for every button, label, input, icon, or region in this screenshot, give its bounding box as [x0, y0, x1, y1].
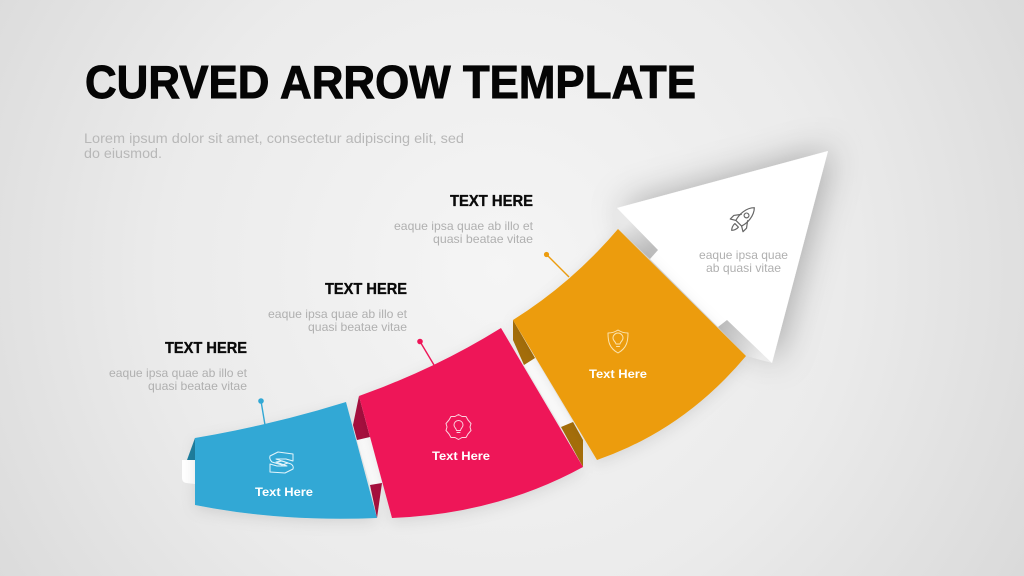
title: CURVED ARROW TEMPLATE — [85, 56, 696, 108]
label: red: Text Here — [432, 449, 490, 463]
callout: step 1 text — [109, 340, 248, 393]
pin: blue — [258, 398, 265, 425]
callout: step 2 text: quasi beatae vitae — [308, 320, 407, 334]
label: orange: Text Here — [589, 367, 647, 381]
icon: shield bulb — [608, 330, 628, 353]
callout: step 3 text: quasi beatae vitae — [433, 232, 533, 246]
callout: step 1 text: TEXT HERE — [165, 340, 247, 357]
icon: rocket — [725, 201, 761, 237]
callout: step 1 text: eaque ipsa quae ab illo et — [109, 366, 248, 380]
panel: orange step — [513, 229, 746, 460]
callout: step 1 text: quasi beatae vitae — [148, 379, 247, 393]
panel: red step — [359, 328, 583, 518]
subtitle text — [84, 131, 464, 161]
callout: step 3 text: eaque ipsa quae ab illo et — [394, 219, 534, 233]
arrow notch upper — [612, 208, 658, 259]
callout: step 2 text: eaque ipsa quae ab illo et — [268, 307, 408, 321]
fold: teal tab — [187, 438, 195, 460]
subtitle text: Lorem ipsum dolor sit amet, consectetur adipiscing elit, sed — [84, 131, 464, 146]
connector: white band left of blue — [182, 460, 195, 484]
arrow head text: ab quasi vitae — [706, 261, 781, 275]
arrow head text — [699, 248, 788, 275]
callout: step 2 text — [268, 281, 408, 334]
arrow head text: eaque ipsa quae — [699, 248, 788, 262]
connector: band red to orange — [513, 320, 583, 467]
pin: red — [417, 339, 434, 365]
callout: step 2 text: TEXT HERE — [325, 281, 407, 298]
arrow notch lower — [718, 320, 772, 363]
icon: hands — [270, 452, 293, 473]
subtitle text: do eiusmod. — [84, 146, 162, 161]
label: blue: Text Here — [255, 485, 313, 499]
connector: band blue to red — [353, 396, 382, 518]
icon: gear bulb — [446, 414, 471, 440]
callout: step 3 text: TEXT HERE — [450, 193, 533, 210]
pin: orange — [544, 252, 569, 277]
panel: blue step — [195, 398, 377, 519]
callout: step 3 text — [394, 193, 534, 246]
arrow head: white — [612, 151, 828, 363]
